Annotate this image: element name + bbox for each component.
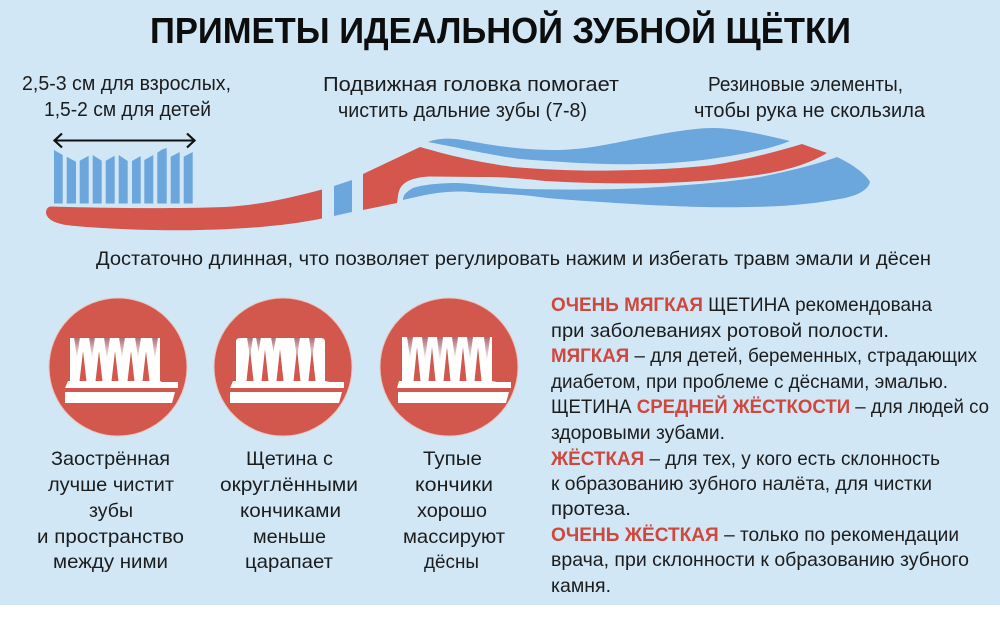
caption: pointed bristles: зубы (89, 500, 133, 522)
text block: bristle hardness: ЩЕТИНА СРЕДНЕЙ ЖЁСТКОСТИ – для людей со (551, 394, 989, 418)
label: rubber elements: чтобы рука не скользила (694, 100, 926, 122)
handle: head section (46, 190, 322, 230)
icon: rounded bristles (214, 298, 352, 436)
label: bristle field width (22, 73, 231, 121)
label: rubber elements (694, 74, 926, 122)
handle: bottom blue grip (403, 157, 870, 207)
caption: rounded bristles (220, 448, 358, 573)
label: movable head: Подвижная головка помогает (323, 74, 619, 96)
caption: rounded bristles: меньше (253, 526, 326, 548)
icon: pointed bristles (49, 298, 187, 436)
text block: bristle hardness: МЯГКАЯ – для детей, беременных, страдающих (551, 345, 977, 367)
text block: bristle hardness: ОЧЕНЬ МЯГКАЯ ЩЕТИНА рекомендована (551, 294, 932, 316)
caption: pointed bristles (37, 448, 184, 573)
caption: rounded bristles: округлёнными (220, 474, 358, 496)
text block: bristle hardness (550, 294, 989, 597)
icon: width arrow (54, 134, 194, 148)
text block: bristle hardness: протеза. (551, 498, 631, 520)
text block: bristle hardness: к образованию зубного налёта, для чистки (551, 473, 932, 495)
text block: bristle hardness: врача, при склонности к образованию зубного (551, 549, 969, 571)
caption: pointed bristles: и пространство (37, 526, 184, 548)
handle: red main body (363, 144, 827, 210)
text block: bristle hardness: диабетом, при проблеме с дёснами, эмалью. (551, 371, 948, 393)
caption: blunt bristles: дёсны (424, 551, 479, 573)
handle: top blue grip (428, 128, 790, 164)
text block: bristle hardness: здоровыми зубами. (551, 422, 725, 444)
caption: blunt bristles (403, 448, 505, 573)
caption: pointed bristles: между ними (53, 551, 168, 573)
caption: blunt bristles: массируют (403, 526, 505, 548)
handle: blue joint (334, 180, 352, 216)
label: movable head (323, 74, 619, 122)
text: length note: Достаточно длинная, что позволяет регулировать нажим и избегать травм эмали и дёсен (96, 248, 931, 270)
caption: rounded bristles: царапает (245, 551, 333, 573)
label: movable head: чистить дальние зубы (7-8) (338, 100, 587, 122)
label: rubber elements: Резиновые элементы, (708, 74, 903, 96)
title: ПРИМЕТЫ ИДЕАЛЬНОЙ ЗУБНОЙ ЩЁТКИ (150, 9, 851, 51)
text block: bristle hardness: ОЧЕНЬ ЖЁСТКАЯ – только по рекомендации (551, 523, 959, 546)
label: bristle field width: 2,5-3 см для взрослых, (22, 73, 231, 95)
text block: bristle hardness: при заболеваниях ротовой полости. (551, 320, 889, 342)
caption: pointed bristles: Заострённая (51, 448, 170, 470)
illustration: toothbrush (46, 128, 870, 230)
caption: blunt bristles: кончики (415, 474, 493, 496)
icon: blunt bristles (380, 298, 518, 436)
caption: pointed bristles: лучше чистит (48, 474, 174, 496)
text block: bristle hardness: камня. (551, 575, 611, 597)
bristles (54, 148, 193, 204)
caption: rounded bristles: Щетина с (246, 448, 333, 470)
caption: rounded bristles: кончиками (240, 500, 341, 522)
label: bristle field width: 1,5-2 см для детей (44, 99, 211, 121)
caption: blunt bristles: хорошо (417, 500, 487, 522)
caption: blunt bristles: Тупые (423, 448, 482, 470)
text block: bristle hardness: ЖЁСТКАЯ – для тех, у кого есть склонность (550, 447, 940, 470)
